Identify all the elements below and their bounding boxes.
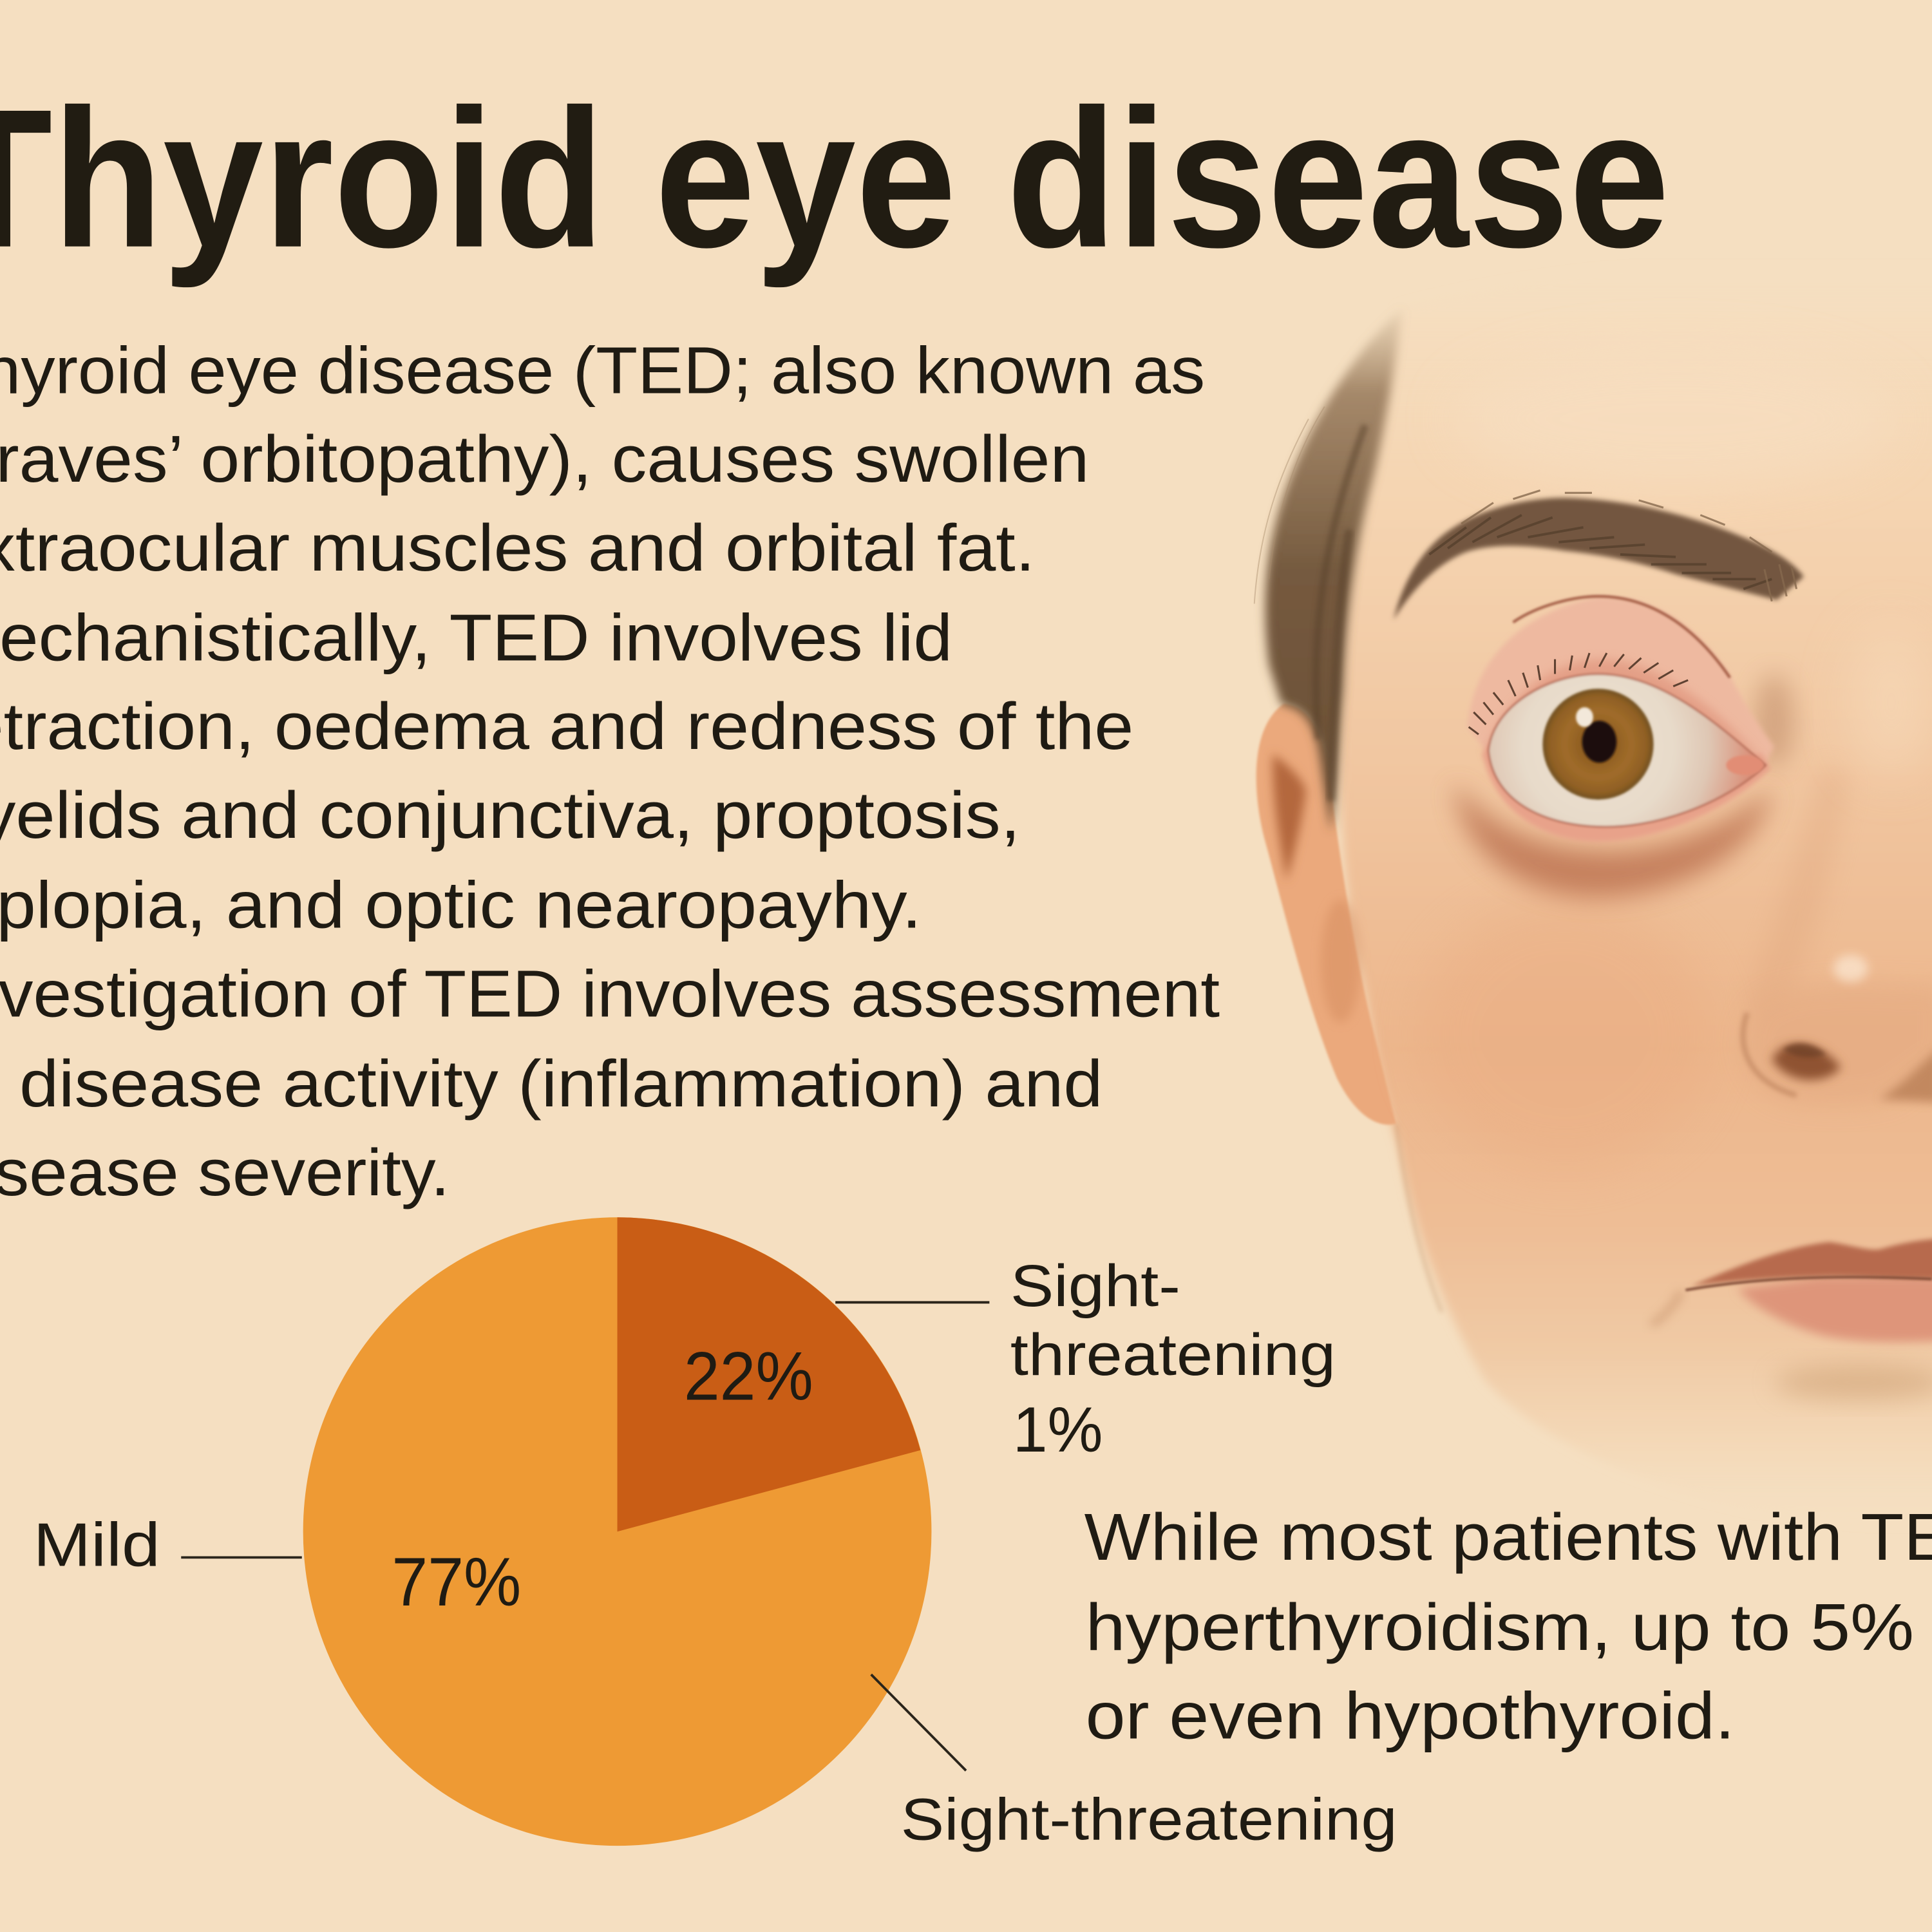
upper lip: [1690, 1238, 1932, 1286]
nostril: [1772, 1044, 1841, 1080]
thyroid status text block: [1084, 1499, 1932, 1753]
nose: [1743, 955, 1932, 1106]
ear: [1256, 703, 1396, 1124]
pie chart: disease severity: [303, 1217, 931, 1846]
eyelid redness: [1484, 659, 1767, 766]
nostril dark centre: [1783, 1044, 1826, 1057]
under-eye bag: [1454, 782, 1772, 897]
slice: moderate to severe 22%: [618, 1217, 920, 1531]
catchlight: [1576, 707, 1593, 727]
lips: [1651, 1238, 1932, 1399]
lower lip: [1738, 1276, 1932, 1342]
cheek shading: [1417, 900, 1712, 1171]
nose highlight: [1833, 955, 1868, 982]
value 77%: 77%: [392, 1543, 521, 1620]
forehead highlight: [1454, 351, 1897, 487]
mouth line: [1685, 1277, 1932, 1290]
sclera: [1488, 674, 1766, 827]
ear lobe shading: [1321, 900, 1360, 1023]
pupil: [1582, 721, 1616, 762]
nose wing crease: [1743, 1013, 1797, 1095]
shadow beneath lip: [1774, 1365, 1932, 1399]
label: sight-threatening: Sight-threatening: [901, 1787, 1397, 1853]
label: sight-threatening 1%: 1%: [1013, 1394, 1103, 1466]
description text block: [0, 332, 1220, 1209]
eyebrow: [1394, 490, 1804, 620]
slice: mild 77%: [303, 1217, 931, 1846]
hair: [1255, 308, 1402, 831]
upper eyelid fold: [1468, 598, 1774, 770]
label: sight-threatening 1%: Sight-: [1010, 1253, 1180, 1319]
iris: [1542, 689, 1654, 800]
nose bridge: [1743, 629, 1932, 1035]
value 22%: 22%: [684, 1337, 813, 1414]
face skin: [1340, 247, 1932, 1540]
nose tip underside: [1879, 1047, 1932, 1103]
eyelid crease line: [1513, 596, 1730, 677]
illustration: face with swollen, proptotic eye: [1255, 247, 1932, 1540]
eye socket shadow: [1754, 674, 1794, 768]
eye: [1482, 674, 1770, 842]
label: mild: Mild: [33, 1511, 160, 1580]
ear inner shadow: [1273, 754, 1306, 881]
upper lashes: [1469, 653, 1688, 734]
label: sight-threatening: [871, 1674, 1397, 1853]
mouth corner crease: [1651, 1291, 1682, 1325]
caruncle: [1726, 755, 1763, 775]
jaw edge: [1396, 1124, 1442, 1312]
label: sight-threatening 1%: [835, 1253, 1336, 1466]
label: sight-threatening 1%: threatening: [1010, 1322, 1336, 1388]
thyroid status text block: or even hypothyroid.: [1086, 1678, 1735, 1753]
lower eyelid rim: [1482, 744, 1770, 842]
